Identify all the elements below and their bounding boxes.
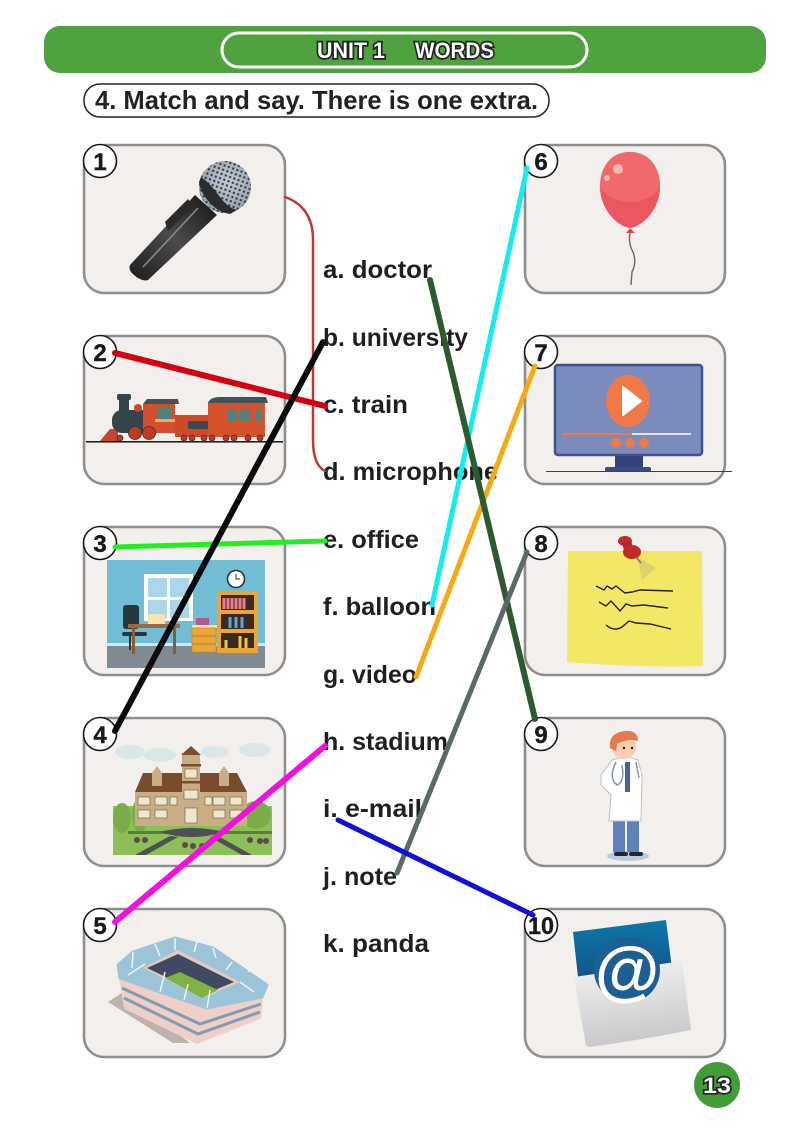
number 7: 7 bbox=[534, 340, 548, 367]
header banner: UNIT 1 bbox=[317, 38, 385, 63]
number 2: 2 bbox=[93, 340, 107, 367]
word list: h. stadium bbox=[323, 728, 448, 756]
icon: balloon bbox=[600, 152, 660, 285]
page number bbox=[694, 1062, 740, 1108]
word list bbox=[322, 256, 498, 958]
word list: b. university bbox=[323, 324, 468, 352]
icon: doctor bbox=[601, 731, 649, 861]
number 10 bbox=[524, 908, 558, 942]
number 5 bbox=[84, 908, 116, 942]
word list: j. note bbox=[322, 863, 397, 891]
word list: c. train bbox=[323, 391, 408, 419]
panel 8: note bbox=[524, 526, 725, 675]
number 4 bbox=[84, 718, 116, 750]
number 5: 5 bbox=[93, 913, 107, 940]
header banner: WORDS bbox=[415, 38, 494, 63]
exercise heading: 4. Match and say. There is one extra. bbox=[95, 85, 538, 115]
number 8: 8 bbox=[534, 531, 548, 558]
number 4: 4 bbox=[93, 722, 107, 749]
number 9: 9 bbox=[534, 722, 548, 749]
panel 5: stadium bbox=[84, 908, 285, 1057]
number 3 bbox=[84, 526, 116, 560]
icon: stadium bbox=[108, 938, 267, 1043]
page number: 13 bbox=[703, 1073, 731, 1098]
number 1 bbox=[84, 144, 116, 178]
header banner bbox=[44, 26, 766, 73]
panel 9: doctor bbox=[524, 718, 725, 866]
number 3: 3 bbox=[93, 531, 107, 558]
icon: e-mail envelope bbox=[573, 920, 691, 1047]
panel 2: train bbox=[84, 336, 285, 484]
word list: g. video bbox=[323, 661, 417, 689]
number 2 bbox=[84, 336, 116, 368]
icon: microphone bbox=[130, 161, 251, 280]
number 1: 1 bbox=[93, 149, 107, 176]
icon: office bbox=[107, 560, 265, 668]
icon: university bbox=[113, 743, 272, 855]
panel 10: e-mail bbox=[524, 908, 725, 1057]
icon: sticky note bbox=[567, 536, 703, 666]
panel 7: video bbox=[524, 336, 732, 484]
panel 4: university bbox=[84, 718, 285, 866]
number 9 bbox=[524, 718, 558, 750]
number 6 bbox=[524, 144, 558, 178]
number 6: 6 bbox=[534, 149, 548, 176]
word list: i. e-mail bbox=[323, 795, 422, 823]
word list: e. office bbox=[323, 526, 419, 554]
word list: a. doctor bbox=[323, 256, 432, 284]
number 8 bbox=[524, 526, 558, 560]
icon: train bbox=[86, 394, 283, 443]
word list: f. balloon bbox=[323, 593, 436, 621]
icon: e-mail envelope: @ bbox=[595, 933, 659, 1007]
word list: k. panda bbox=[323, 930, 430, 958]
word list: d. microphone bbox=[323, 458, 498, 486]
matching lines bbox=[115, 168, 535, 922]
number 7 bbox=[524, 336, 558, 368]
panel 3: office bbox=[84, 526, 285, 675]
panel 6: balloon bbox=[524, 144, 725, 293]
panel 1: microphone bbox=[84, 144, 285, 293]
number 10: 10 bbox=[528, 913, 554, 940]
icon: video player bbox=[546, 365, 732, 472]
